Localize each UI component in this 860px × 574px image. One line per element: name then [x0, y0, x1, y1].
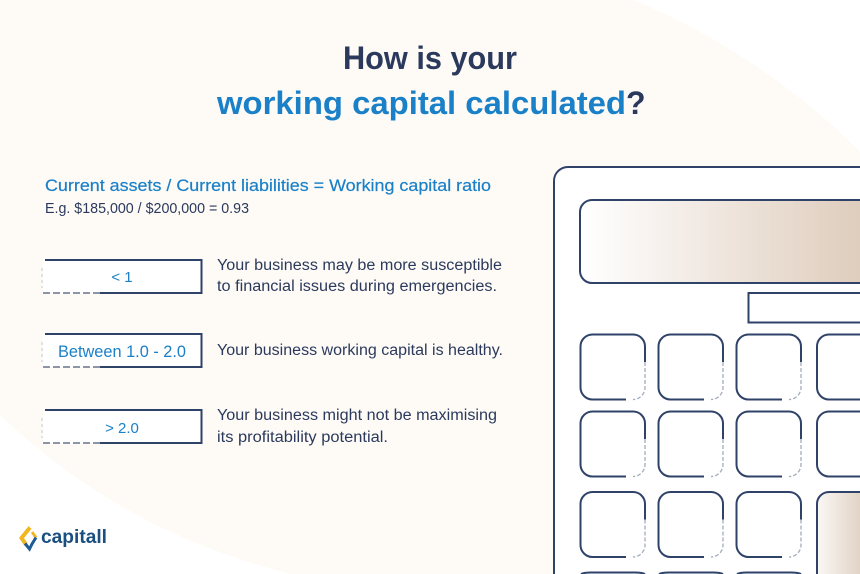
small display — [748, 293, 860, 322]
row: between 1.0 and 2.0: Your business working capital is healthy. — [217, 342, 503, 359]
keypad — [580, 334, 860, 574]
title: ? — [626, 85, 646, 121]
calculator screen — [580, 200, 860, 283]
logo: capitall — [41, 527, 107, 548]
row: greater than 2.0: Your business might not be maximising — [217, 407, 497, 424]
title — [216, 40, 646, 121]
row: less than 1: to financial issues during emergencies. — [217, 278, 497, 295]
calculator body — [554, 167, 860, 574]
row: greater than 2.0: > 2.0 — [105, 420, 139, 437]
row: greater than 2.0 — [42, 407, 497, 446]
row: less than 1: < 1 — [111, 269, 133, 286]
calculator — [554, 167, 860, 574]
formula text: Current assets / Current liabilities = Working capital ratio — [45, 177, 491, 195]
title: working capital calculated — [216, 85, 626, 121]
row: less than 1 — [42, 257, 502, 295]
row: greater than 2.0: its profitability potential. — [217, 429, 388, 446]
title: How is your — [343, 40, 517, 76]
row: between 1.0 and 2.0 — [42, 334, 503, 367]
formula text — [45, 177, 491, 217]
row: less than 1: Your business may be more susceptible — [217, 257, 502, 274]
row: between 1.0 and 2.0: Between 1.0 - 2.0 — [58, 343, 186, 361]
formula text: E.g. $185,000 / $200,000 = 0.93 — [45, 200, 249, 217]
